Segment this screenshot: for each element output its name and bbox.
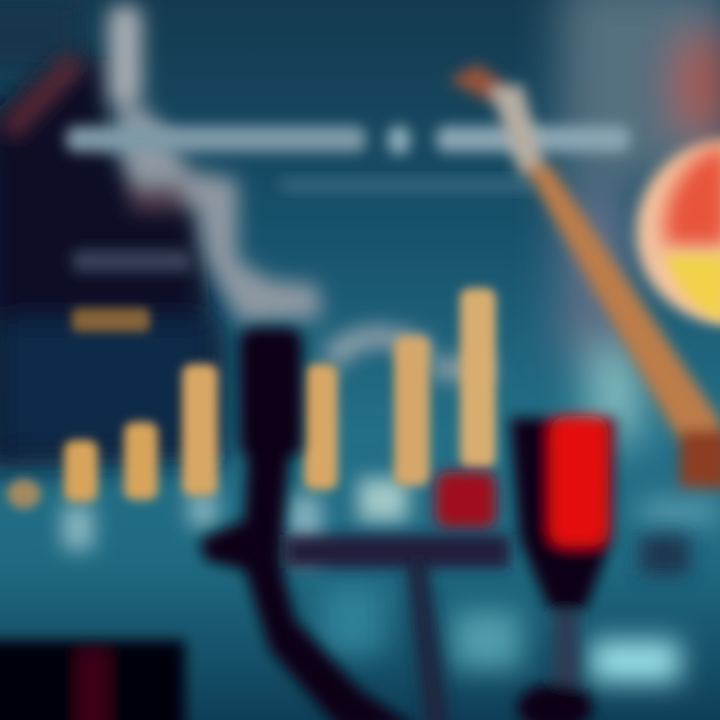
right side haze [560, 0, 720, 440]
dark silhouette stand [200, 328, 510, 720]
coloured disc [636, 140, 720, 324]
bar 6 [394, 336, 430, 486]
maroon streak at top left [0, 52, 85, 140]
bright floor panels [320, 500, 720, 682]
illegible left label [72, 250, 192, 272]
illegible subtitle band [280, 178, 540, 192]
bar 5 [304, 364, 338, 490]
pale descending line [108, 5, 492, 380]
illegible title band [66, 126, 630, 154]
wooden pole with tip [448, 64, 720, 490]
bar 2 [64, 440, 98, 502]
bar 3 [124, 422, 158, 500]
dark bottom-left block [0, 640, 185, 720]
bar 7 [460, 288, 496, 468]
dark marks lower right [640, 535, 690, 575]
dark panel on the left [0, 0, 225, 470]
bar 1 [7, 479, 41, 509]
bar reflections [62, 478, 408, 565]
bar 4 [182, 364, 218, 496]
red short glass [436, 472, 496, 528]
bar chart [7, 288, 496, 509]
tall wine glass [510, 416, 615, 720]
illegible orange value [72, 308, 150, 332]
